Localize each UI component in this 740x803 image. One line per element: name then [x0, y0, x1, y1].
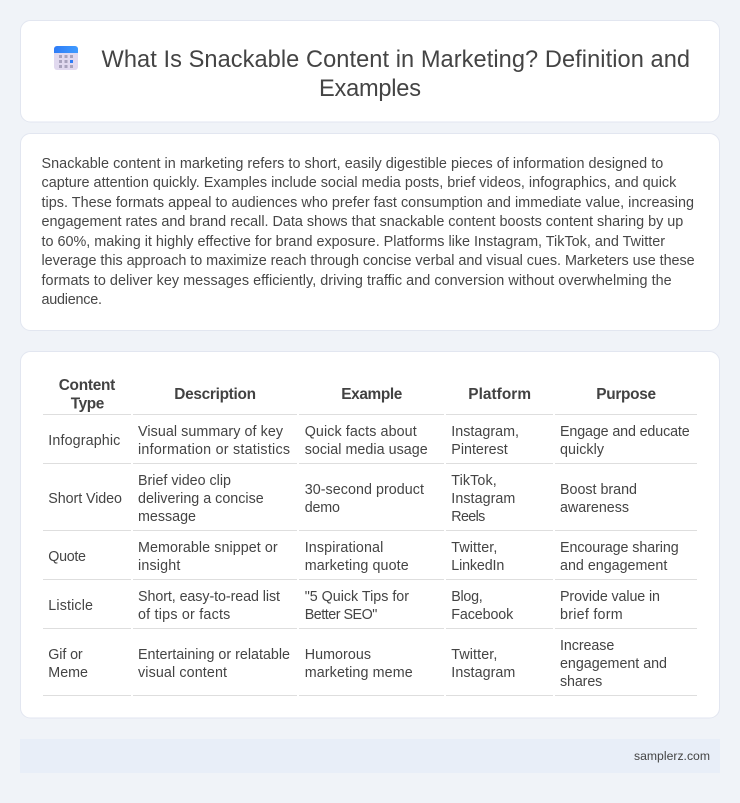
- table row: Gif or Meme: shares: [560, 674, 602, 690]
- title: [102, 47, 690, 102]
- table row: Infographic: Engage and educate: [560, 424, 690, 440]
- table row: Listicle: "5 Quick Tips for: [305, 589, 409, 605]
- table row: Listicle: Short, easy-to-read list: [138, 589, 280, 605]
- table row: Short Video: demo: [305, 500, 340, 516]
- table row: Short Video: 30-second product: [305, 482, 424, 498]
- text block: definition paragraph: tips. These formats appeal to audiences who prefer fast consumption and immediate value, increasing: [42, 195, 694, 211]
- table row: Quote: Memorable snippet or: [138, 540, 278, 556]
- table header row: Content: [59, 377, 115, 394]
- table row: Gif or Meme: engagement and: [560, 656, 667, 672]
- table row: Gif or Meme: Twitter,: [451, 647, 497, 663]
- text block: definition paragraph: formats to deliver key messages efficiently, driving traffic and conversion without overwhelming the: [42, 273, 672, 289]
- table row: Infographic: quickly: [560, 442, 605, 458]
- table row: Listicle: Provide value in: [560, 589, 660, 605]
- table row: Listicle: Better SEO": [305, 607, 377, 623]
- table row: Gif or Meme: Gif or: [48, 647, 83, 663]
- text block: definition paragraph: engagement rates and brand recall. Data shows that snackable content boosts content sharing by up: [42, 214, 683, 230]
- text block: definition paragraph: to 60%, making it highly effective for brand exposure. Platforms like Instagram, TikTok, and Twitter: [42, 234, 665, 250]
- table row: Quote: Inspirational: [305, 540, 383, 556]
- table row: Listicle: of tips or facts: [138, 607, 230, 623]
- panel: title card: [20, 20, 720, 122]
- table row: Short Video: delivering a concise: [138, 491, 264, 507]
- table header row: Type: [71, 396, 105, 412]
- text block: definition paragraph: [42, 156, 695, 308]
- table row: Listicle: brief form: [560, 607, 623, 623]
- table row: Quote: Twitter,: [451, 540, 497, 556]
- table row: Quote: Encourage sharing: [560, 540, 679, 556]
- icon: calendar: [54, 46, 78, 70]
- table row: Gif or Meme: marketing meme: [305, 665, 413, 681]
- table row: Short Video: Short Video: [48, 491, 122, 507]
- panel: introduction: [20, 134, 720, 330]
- table row: Short Video: TikTok,: [451, 473, 497, 489]
- table row: Gif or Meme: Increase: [560, 638, 614, 654]
- text block: definition paragraph: leverage this approach to maximize reach through concise verbal and visual cues. Marketers use these: [42, 253, 695, 269]
- text block: definition paragraph: capture attention quickly. Examples include social media posts, brief videos, infographics, and quick: [42, 175, 677, 191]
- table row: Infographic: Visual summary of key: [138, 424, 284, 440]
- table row: Quote: LinkedIn: [451, 558, 504, 574]
- table header row: Description: [174, 386, 256, 403]
- table row: Quote: and engagement: [560, 558, 667, 574]
- table header row: Example: [341, 386, 403, 403]
- table header row: Purpose: [596, 386, 656, 403]
- table row: Short Video: Reels: [451, 509, 485, 525]
- table row: Infographic: Instagram,: [451, 424, 519, 440]
- table header row: Platform: [468, 386, 531, 403]
- table row: Infographic: Quick facts about: [305, 424, 417, 440]
- table row: Infographic: [48, 424, 690, 458]
- table row: Quote: marketing quote: [305, 558, 409, 574]
- table row: Gif or Meme: Instagram: [451, 665, 515, 681]
- table row: Infographic: social media usage: [305, 442, 428, 458]
- table row: Infographic: Pinterest: [451, 442, 508, 458]
- table row: Short Video: Boost brand: [560, 482, 637, 498]
- table row: Short Video: Brief video clip: [138, 473, 231, 489]
- table row: Short Video: message: [138, 509, 196, 525]
- table row: Short Video: awareness: [560, 500, 629, 516]
- panel: content types table: [20, 352, 720, 718]
- table header row: [59, 377, 656, 412]
- table row: Gif or Meme: visual content: [138, 665, 227, 681]
- table row: Short Video: Instagram: [451, 491, 515, 507]
- table row: Listicle: Blog,: [451, 589, 483, 605]
- table row: Short Video: [48, 473, 637, 525]
- table row: Listicle: Listicle: [48, 598, 93, 614]
- footer: [20, 739, 720, 773]
- table row: Quote: insight: [138, 558, 180, 574]
- title: Examples: [319, 76, 421, 102]
- table row: Gif or Meme: Humorous: [305, 647, 371, 663]
- table row: Listicle: Facebook: [451, 607, 514, 623]
- table row: Quote: [48, 540, 679, 574]
- table row: Infographic: information or statistics: [138, 442, 290, 458]
- table row: Listicle: [48, 589, 660, 623]
- table row: Infographic: Infographic: [48, 433, 120, 449]
- table row: Quote: Quote: [48, 549, 86, 565]
- table row: Gif or Meme: [48, 638, 667, 690]
- table row: Gif or Meme: Meme: [48, 665, 88, 681]
- table row: Gif or Meme: Entertaining or relatable: [138, 647, 290, 663]
- footer: samplerz.com: [634, 749, 710, 763]
- text block: definition paragraph: audience.: [42, 292, 102, 308]
- title: What Is Snackable Content in Marketing? Definition and: [102, 47, 690, 73]
- text block: definition paragraph: Snackable content in marketing refers to short, easily digestible pieces of information designed to: [42, 156, 663, 172]
